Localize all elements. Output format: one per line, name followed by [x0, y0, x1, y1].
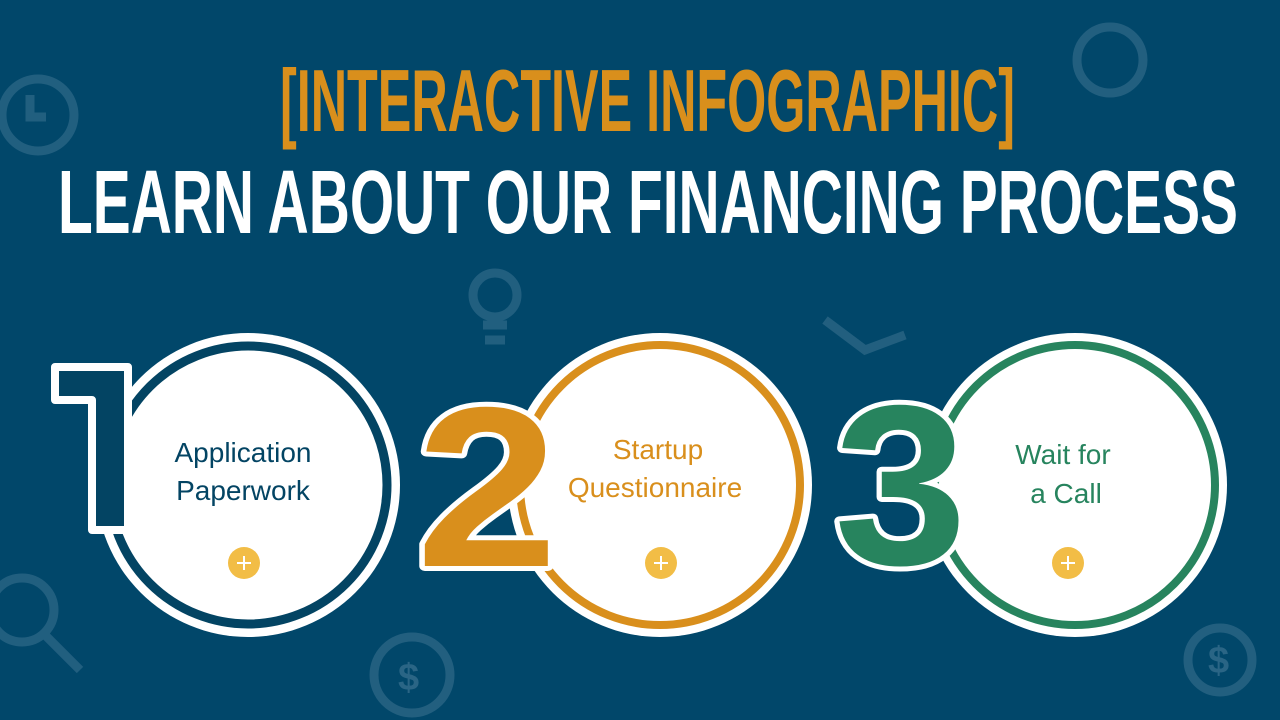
- step 2: [416, 333, 812, 637]
- plus button 3: [1052, 547, 1084, 579]
- icon: magnifier: [0, 578, 80, 670]
- number 1: [55, 367, 128, 530]
- icon: 24h clock: [1077, 27, 1143, 93]
- icon: handshake: [825, 320, 905, 350]
- step 2: Questionnaire: [568, 472, 742, 503]
- plus button 1: [228, 547, 260, 579]
- plus button 2: [645, 547, 677, 579]
- icon: dollar: [1188, 628, 1252, 692]
- icon: lightbulb: [473, 273, 517, 340]
- number 2: 2: [416, 361, 558, 615]
- background icons: $: [1208, 640, 1229, 682]
- icon: alarm clock: [2, 79, 74, 151]
- step 3: [834, 333, 1227, 637]
- label 2: Startup: [613, 434, 703, 465]
- number 3: 3: [834, 357, 967, 613]
- step 3: a Call: [1030, 478, 1102, 509]
- icon: dollar cycle: [374, 637, 450, 713]
- step 1: Paperwork: [176, 475, 311, 506]
- step 1: [55, 333, 400, 637]
- label 1: Application: [175, 437, 311, 468]
- background icons: $: [398, 657, 419, 699]
- titles: [58, 51, 1238, 253]
- label 3: Wait for: [1015, 439, 1111, 470]
